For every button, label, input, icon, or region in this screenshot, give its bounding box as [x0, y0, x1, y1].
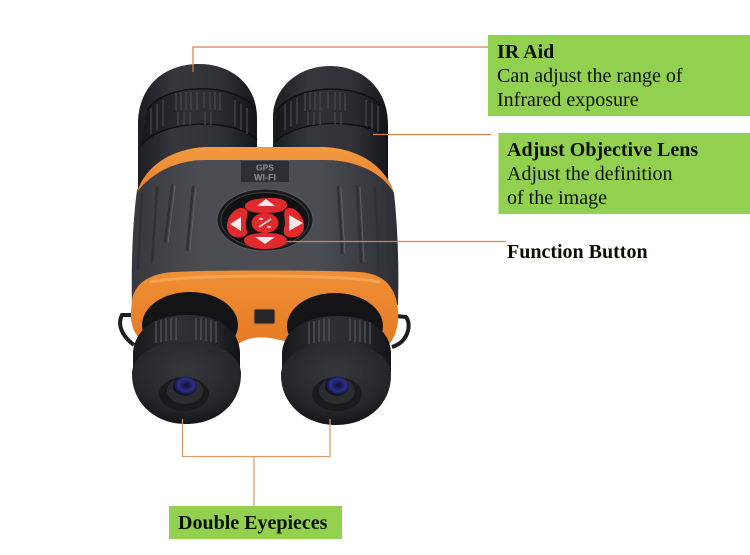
bottom orange plate	[131, 270, 398, 348]
right objective tube	[273, 66, 388, 200]
binocular device	[120, 64, 409, 425]
down button	[244, 233, 287, 249]
callout: IR Aid: Can adjust the range of	[497, 65, 683, 87]
main body	[132, 148, 398, 305]
right button	[284, 208, 304, 238]
callout: Adjust Objective Lens: Adjust the definition	[507, 163, 673, 185]
left objective tube	[138, 64, 257, 195]
callout: IR Aid: IR Aid	[497, 41, 554, 63]
callout: Adjust Objective Lens: Adjust Objective Lens	[507, 139, 698, 161]
callout: IR Aid	[488, 35, 750, 116]
leader line: double eyepieces	[182, 419, 330, 506]
left eyepiece	[132, 292, 241, 424]
left strap lug	[120, 315, 134, 345]
leader line: function button	[287, 240, 506, 242]
plate highlight	[150, 276, 380, 282]
right lens	[325, 376, 349, 396]
callout: IR Aid: Infrared exposure	[497, 89, 639, 111]
body grip ridges	[138, 185, 390, 270]
callout: Double Eyepieces: Double Eyepieces	[178, 512, 328, 534]
right eyepiece	[281, 293, 391, 425]
label: Function Button: Function Button	[507, 241, 648, 263]
small sensor window	[254, 309, 275, 324]
ok button	[252, 213, 278, 233]
control button pad	[217, 189, 313, 251]
right strap lug	[392, 316, 409, 347]
GPS WI-FI label: GPS	[256, 162, 274, 172]
callout: Double Eyepieces	[169, 506, 342, 539]
left button	[227, 208, 248, 238]
leader line: IR Aid	[193, 47, 492, 72]
leader line: objective lens	[373, 134, 491, 136]
GPS WI-FI label: WI-FI	[254, 172, 276, 182]
GPS WI-FI label	[241, 161, 289, 182]
callout: Adjust Objective Lens: of the image	[507, 187, 607, 209]
callout: Adjust Objective Lens	[498, 133, 750, 214]
up button	[245, 198, 287, 213]
top orange band	[137, 147, 394, 193]
left lens	[173, 376, 197, 396]
